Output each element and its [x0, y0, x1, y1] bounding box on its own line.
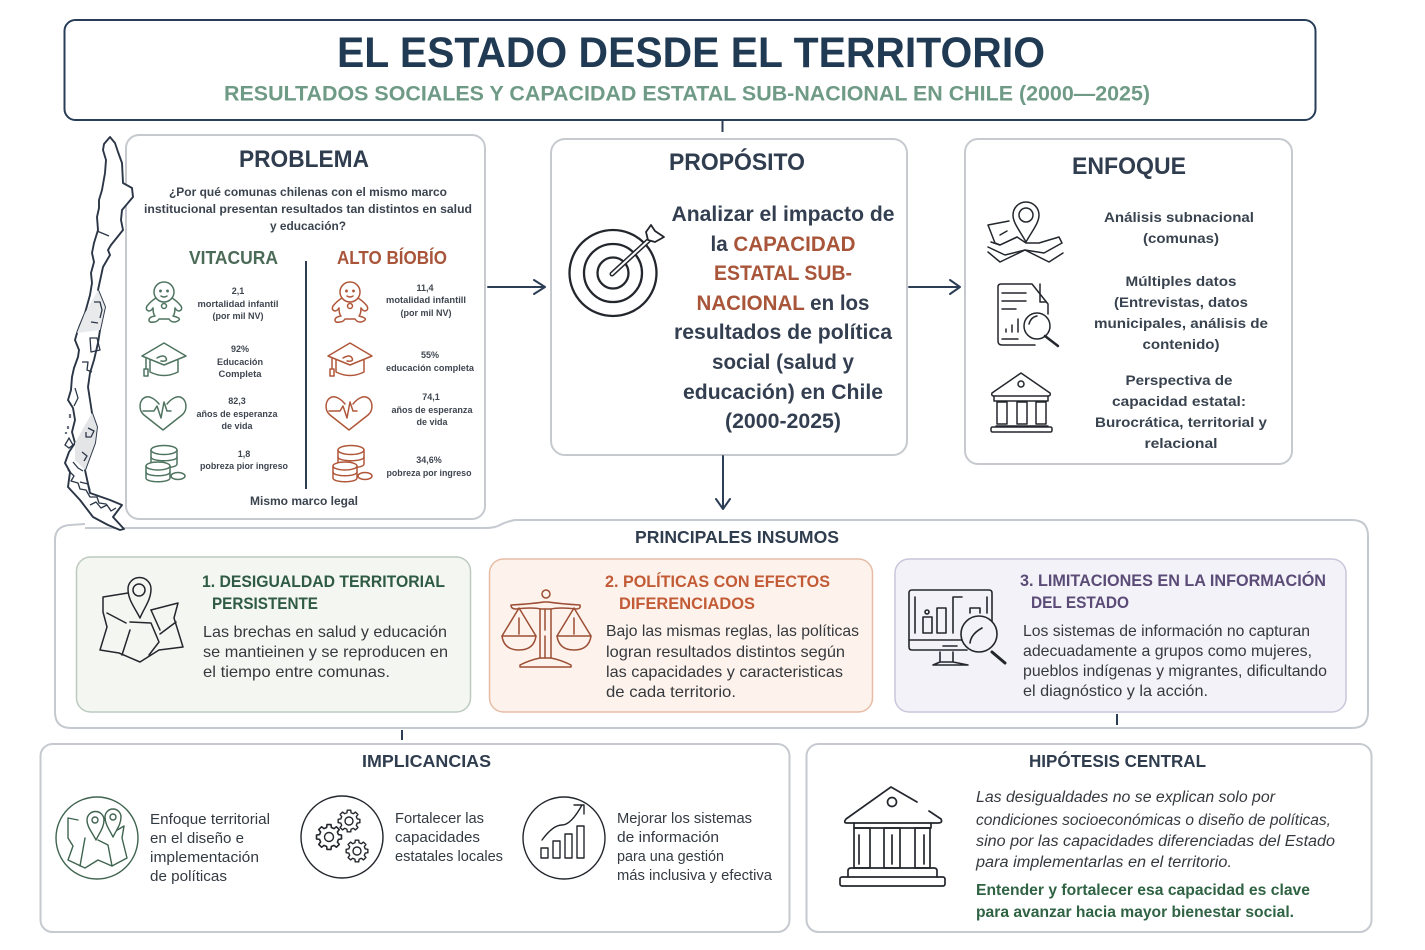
stats: Alto Bíobío: 74,1 [422, 392, 440, 402]
card 2 heading: DIFERENCIADOS [619, 594, 755, 613]
stats: Vitacura: 1,8 [238, 449, 250, 459]
stats: Vitacura: 82,3 [228, 396, 246, 406]
subtitle: RESULTADOS SOCIALES Y CAPACIDAD ESTATAL SUB-NACIONAL EN CHILE (2000—2025) [224, 82, 1150, 106]
text: enfoque territorial: de políticas [150, 868, 227, 885]
icon: target [570, 225, 664, 316]
text: enfoque territorial: en el diseño e [150, 830, 244, 847]
stats: Vitacura: Educación [217, 357, 263, 367]
icon: scales [502, 590, 591, 667]
card 1: desigualdad territorial [76, 557, 470, 712]
hipótesis text: sino por las capacidades diferenciadas del Estado [976, 833, 1335, 850]
item: enfoque territorial [56, 797, 270, 885]
card 2 heading [605, 572, 830, 613]
stats: Vitacura: 92% [231, 344, 249, 354]
card 3: limitaciones en la información [895, 559, 1346, 712]
card 3 heading: 3. LIMITACIONES EN LA INFORMACIÓN [1020, 571, 1326, 590]
propósito text: ESTATAL SUB- [714, 262, 852, 285]
footer: mismo marco legal: Mismo marco legal [250, 496, 358, 508]
card 1 heading: 1. DESIGUALDAD TERRITORIAL [202, 572, 445, 591]
item: mejorar sistemas [523, 797, 773, 884]
stats: Alto Bíobío: años de esperanza [392, 405, 473, 415]
card 3 text: el diagnóstico y la acción. [1023, 683, 1208, 700]
stats: Alto Bíobío: educación completa [386, 363, 475, 373]
text: fortalecer capacidades: capacidades [395, 829, 480, 846]
card 2 heading: 2. POLÍTICAS CON EFECTOS [605, 572, 830, 591]
enfoque item: múltiples datos [1094, 273, 1268, 352]
text: enfoque territorial: implementación [150, 849, 259, 866]
problema question: y educación? [270, 221, 346, 233]
card 1 text: el tiempo entre comunas. [203, 664, 390, 681]
enfoque item: múltiples datos: contenido) [1142, 336, 1220, 352]
text: enfoque territorial: Enfoque territorial [150, 811, 270, 828]
card 1 text [203, 624, 448, 681]
stats: Vitacura: Completa [218, 369, 263, 379]
enfoque item: múltiples datos: municipales, análisis de [1094, 315, 1268, 331]
propósito text: (2000-2025) [725, 410, 841, 433]
stats: Vitacura: años de esperanza [196, 409, 278, 419]
hipótesis heading: HIPÓTESIS CENTRAL [1029, 750, 1206, 771]
stats: Alto Bíobío: motalidad infantill [386, 295, 466, 305]
icon: territory map [100, 578, 183, 662]
stats: Vitacura: mortalidad infantil [198, 299, 278, 309]
card 2 text: las capacidades y caracteristicas [606, 664, 843, 681]
icon: institution [991, 373, 1052, 432]
arrow: propósito to insumos [716, 456, 730, 509]
stats: Alto Bíobío: 34,6% [416, 455, 442, 465]
heading: Alto Bíobío: ALTO BÍOBÍO [337, 247, 447, 268]
text: fortalecer capacidades: Fortalecer las [395, 810, 484, 827]
propósito text: Analizar el impacto de [672, 203, 894, 226]
arrow: propósito to enfoque [909, 280, 960, 294]
panel: hipótesis central [806, 744, 1372, 932]
card 3 heading: DEL ESTADO [1031, 593, 1129, 612]
hipótesis text [975, 789, 1335, 871]
stats: Vitacura: 2,1 [232, 286, 244, 296]
text: mejorar sistemas: de información [617, 829, 719, 846]
icons: Vitacura [140, 282, 186, 482]
stats: Vitacura: pobreza pior ingreso [200, 461, 288, 471]
enfoque item: análisis subnacional: Análisis subnacional [1104, 209, 1254, 225]
enfoque item: análisis subnacional [1104, 209, 1254, 246]
card 1 text: Las brechas en salud y educación [203, 624, 447, 641]
stats: Alto Bíobío: de vida [416, 417, 448, 427]
card 3 text: Los sistemas de información no capturan [1023, 623, 1310, 640]
panel: problema [126, 135, 485, 519]
title banner [64, 20, 1316, 120]
panel: propósito [551, 139, 907, 455]
enfoque heading: ENFOQUE [1072, 153, 1186, 180]
stats: Alto Bíobío: 11,4 [416, 283, 434, 293]
hipótesis text: Las desigualdades no se explican solo por [976, 789, 1276, 806]
text: fortalecer capacidades [395, 810, 503, 865]
card 1 text: se mantieinen y se reproducen en [203, 644, 448, 661]
text: mejorar sistemas: Mejorar los sistemas [617, 810, 752, 827]
card 2 text: Bajo las mismas reglas, las políticas [606, 623, 859, 640]
propósito text: social (salud y [712, 351, 854, 374]
problema heading: PROBLEMA [239, 146, 369, 173]
text: mejorar sistemas: para una gestión [617, 848, 724, 865]
propósito text: educación) en Chile [683, 381, 883, 404]
main title: EL ESTADO DESDE EL TERRITORIO [337, 29, 1045, 77]
icon: map pin [988, 202, 1063, 262]
enfoque item: análisis subnacional: (comunas) [1143, 230, 1219, 246]
card 3 text [1023, 623, 1327, 700]
panel: enfoque [965, 139, 1292, 464]
enfoque item: múltiples datos: Múltiples datos [1126, 273, 1237, 289]
map of Chile [65, 137, 133, 530]
card 3 text: pueblos indígenas y migrantes, dificultando [1023, 663, 1327, 680]
hipótesis conclusion: para avanzar hacia mayor bienestar social. [976, 904, 1294, 921]
implicancias heading: IMPLICANCIAS [362, 751, 491, 771]
item: fortalecer capacidades [301, 796, 503, 878]
hipótesis conclusion [976, 882, 1310, 921]
hipótesis conclusion: Entender y fortalecer esa capacidad es clave [976, 882, 1310, 899]
stats: Alto Bíobío [386, 283, 475, 478]
card 1 heading [202, 572, 445, 613]
panel: implicancias [40, 744, 790, 932]
card 1 heading: PERSISTENTE [212, 594, 318, 613]
insumos heading: PRINCIPALES INSUMOS [635, 527, 839, 547]
enfoque item: perspectiva: relacional [1144, 435, 1218, 451]
propósito text: NACIONAL en los [696, 292, 870, 315]
connector: insumos to hipótesis [1116, 714, 1118, 725]
card 2 text [606, 623, 859, 701]
stats: Vitacura [196, 286, 288, 471]
text: enfoque territorial [150, 811, 270, 885]
connector: insumos to implicancias [401, 730, 403, 740]
text: fortalecer capacidades: estatales locales [395, 848, 503, 865]
propósito text: la CAPACIDAD [710, 233, 856, 256]
enfoque item: perspectiva: capacidad estatal: [1112, 393, 1246, 409]
icon: institution [840, 787, 945, 886]
card 2 text: logran resultados distintos según [606, 644, 845, 661]
enfoque item: perspectiva: Perspectiva de [1126, 372, 1233, 388]
problema question: institucional presentan resultados tan distintos en salud [144, 204, 472, 216]
problema question [144, 187, 472, 233]
card 2: políticas con efectos diferenciados [490, 559, 872, 712]
heading: Vitacura: VITACURA [189, 248, 278, 268]
icons: Alto Bíobío [326, 282, 372, 482]
hipótesis text: condiciones socioeconómicas o diseño de políticas, [976, 812, 1331, 829]
text: mejorar sistemas [617, 810, 773, 884]
stats: Alto Bíobío: 55% [421, 350, 439, 360]
enfoque item: múltiples datos: (Entrevistas, datos [1114, 294, 1248, 310]
card 3 text: adecuadamente a grupos como mujeres, [1023, 643, 1312, 660]
panel: principales insumos [55, 520, 1368, 728]
problema question: ¿Por qué comunas chilenas con el mismo marco [169, 187, 447, 199]
arrow: problema to propósito [488, 280, 545, 294]
connector: title to purpose [722, 121, 724, 132]
icon: document and magnifier [998, 284, 1058, 346]
stats: Alto Bíobío: (por mil NV) [400, 308, 452, 318]
enfoque item: perspectiva [1095, 372, 1267, 451]
enfoque item: perspectiva: Burocrática, territorial y [1095, 414, 1267, 430]
hipótesis text: para implementarlas en el territorio. [975, 854, 1232, 871]
stats: Alto Bíobío: pobreza por ingreso [386, 468, 472, 478]
propósito text [672, 203, 894, 433]
text: mejorar sistemas: más inclusiva y efectiva [617, 867, 773, 884]
stats: Vitacura: de vida [222, 421, 253, 431]
stats: Vitacura: (por mil NV) [212, 311, 264, 321]
card 3 heading [1020, 571, 1326, 612]
card 2 text: de cada territorio. [606, 684, 736, 701]
propósito heading: PROPÓSITO [669, 148, 805, 176]
icon: monitor and magnifier [909, 590, 1005, 665]
propósito text: resultados de política [674, 321, 892, 344]
